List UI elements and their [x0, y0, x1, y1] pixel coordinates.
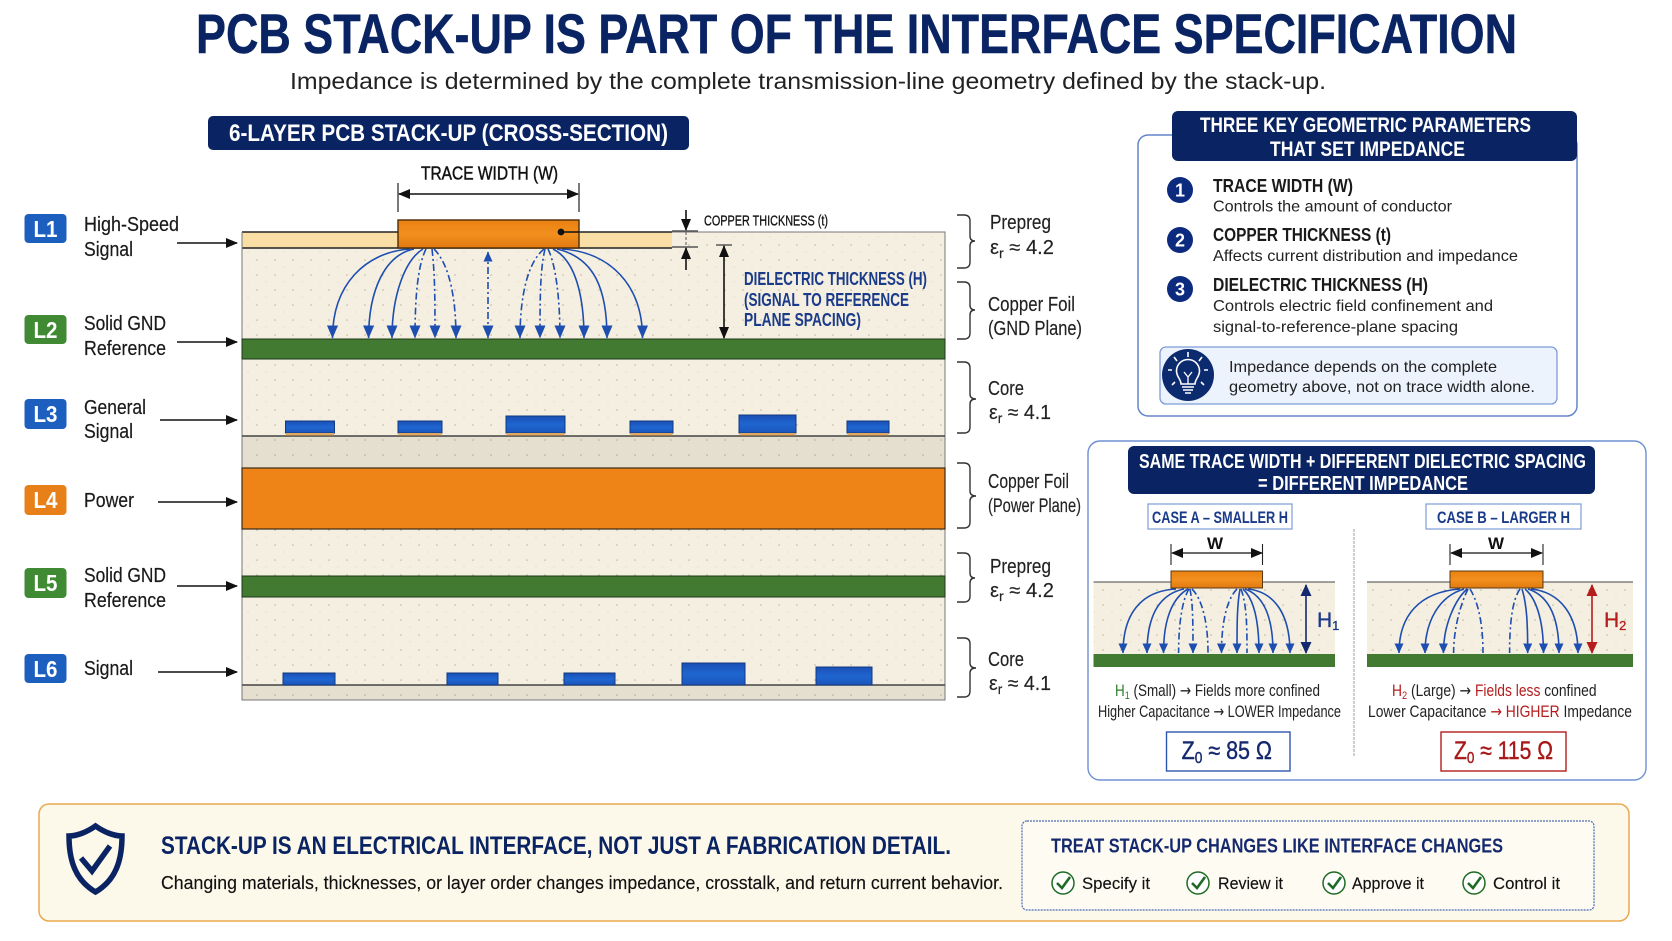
- case B H2 dimension: [1592, 585, 1626, 653]
- check: approve: Approve it: [1352, 874, 1424, 893]
- core upper: ≈ 4.1: [1002, 402, 1051, 424]
- case A width dimension: W: [1207, 534, 1224, 553]
- material annotations: [957, 212, 1082, 697]
- panel: three key geometric parameters: [1138, 111, 1577, 416]
- check: control: [1463, 872, 1560, 894]
- case B explanation: Lower Capacitance → HIGHER Impedance: [1368, 702, 1632, 721]
- case A explanation: Higher Capacitance → LOWER Impedance: [1098, 702, 1341, 721]
- case A impedance value: Z: [1182, 737, 1197, 765]
- prepreg lower: ε: [990, 580, 999, 602]
- core upper: r: [998, 410, 1003, 426]
- case A explanation: → Fields more confined: [1180, 681, 1349, 700]
- case B width dimension: [1450, 534, 1543, 565]
- core lower: Core: [988, 649, 1024, 671]
- parameter 2: Affects current distribution and impedance: [1213, 248, 1518, 265]
- core upper: [957, 362, 1051, 433]
- check: review: [1187, 872, 1283, 894]
- case A label: CASE A – SMALLER H: [1152, 508, 1288, 527]
- case B explanation: [1368, 681, 1632, 721]
- layer L3 label: General: [84, 397, 146, 419]
- prepreg lower: Prepreg: [990, 556, 1051, 578]
- copper foil GND: [957, 282, 1082, 340]
- prepreg top: ≈ 4.2: [1004, 237, 1054, 259]
- parameter 2: 2: [1175, 230, 1185, 250]
- parameter 3: 3: [1175, 280, 1185, 300]
- layer L2 label: L2: [34, 317, 58, 343]
- case B impedance value: 0: [1467, 750, 1474, 767]
- check: control: Control it: [1493, 874, 1560, 893]
- parameter 3: [1167, 275, 1493, 336]
- case B impedance value: ≈ 115 Ω: [1474, 737, 1553, 765]
- main copper trace: [398, 220, 579, 248]
- banner heading: STACK-UP IS AN ELECTRICAL INTERFACE, NOT JUST A FABRICATION DETAIL.: [161, 832, 951, 860]
- callout: impedance note: geometry above, not on trace width alone.: [1229, 379, 1535, 396]
- check: specify: Specify it: [1082, 874, 1150, 893]
- subtitle: Impedance is determined by the complete transmission-line geometry defined by the stack-up.: [290, 68, 1326, 94]
- copper foil power: Copper Foil: [988, 471, 1069, 493]
- dielectric thickness dimension: [716, 245, 927, 338]
- case B explanation: 2: [1402, 690, 1407, 702]
- power plane L4: [242, 468, 945, 529]
- parameter 3: DIELECTRIC THICKNESS (H): [1213, 275, 1428, 295]
- case A H1 dimension: 1: [1332, 618, 1339, 633]
- check: approve: [1323, 872, 1424, 894]
- case B cross-section: [1367, 571, 1633, 667]
- core upper: ε: [989, 402, 998, 424]
- L3 signal traces: [286, 415, 889, 436]
- parameter 3: Controls electric field confinement and: [1213, 298, 1493, 315]
- callout: impedance note: Impedance depends on the complete: [1229, 359, 1497, 376]
- layer L1 label: [24, 214, 237, 261]
- layer L1 label: L1: [34, 216, 58, 242]
- layer L2 label: Reference: [84, 338, 166, 360]
- panel heading: THAT SET IMPEDANCE: [1270, 138, 1465, 161]
- case A cross-section: [1094, 571, 1335, 667]
- core lower: [957, 638, 1051, 697]
- panel heading: [1172, 111, 1577, 161]
- layer L5 label: Reference: [84, 590, 166, 612]
- layer L4 label: [24, 485, 237, 515]
- case B label: [1426, 504, 1581, 529]
- case A label: [1148, 504, 1292, 529]
- case B impedance value: Z: [1454, 737, 1469, 765]
- prepreg lower: ≈ 4.2: [1004, 580, 1054, 602]
- parameter 2: [1167, 225, 1518, 265]
- core lower: ε: [989, 673, 998, 695]
- panel: bottom takeaway banner: [39, 804, 1629, 921]
- case B explanation: (Large): [1407, 682, 1459, 700]
- layer L5 label: [24, 565, 237, 612]
- L6 signal traces: [283, 663, 872, 685]
- layer L3 label: L3: [34, 401, 58, 427]
- dielectric layers: [242, 232, 945, 700]
- layer badges and labels: [24, 214, 237, 683]
- copper foil GND: (GND Plane): [988, 318, 1082, 340]
- panel heading: = DIFFERENT IMPEDANCE: [1258, 473, 1468, 495]
- parameter 1: TRACE WIDTH (W): [1213, 176, 1353, 196]
- case B explanation: → Fields less confined: [1459, 681, 1607, 700]
- case B explanation: H: [1392, 682, 1407, 702]
- parameter 1: Controls the amount of conductor: [1213, 198, 1453, 216]
- checklist box: TREAT STACK-UP CHANGES LIKE INTERFACE CHANGES: [1051, 836, 1503, 858]
- layer L5 label: Solid GND: [84, 565, 166, 587]
- dielectric thickness dimension: PLANE SPACING): [744, 310, 861, 330]
- layer L4 label: L4: [34, 487, 58, 513]
- case B H2 dimension: H: [1604, 609, 1619, 632]
- layer L6 label: Signal: [84, 658, 133, 680]
- case A H1 dimension: [1306, 585, 1339, 653]
- dielectric thickness dimension: DIELECTRIC THICKNESS (H): [744, 269, 927, 289]
- electric field lines: [332, 249, 642, 338]
- prepreg top: [957, 212, 1054, 268]
- stack-up cross-section: [242, 164, 945, 700]
- checklist box: [1022, 821, 1594, 910]
- panel: same trace width comparison: [1088, 441, 1646, 780]
- icon: shield with check: [69, 826, 122, 892]
- core lower: ≈ 4.1: [1002, 673, 1051, 695]
- icon: lightbulb: [1162, 349, 1214, 401]
- case A H1 dimension: H: [1317, 609, 1332, 632]
- layer L6 label: L6: [34, 656, 58, 682]
- case B width dimension: W: [1488, 534, 1505, 553]
- layer L3 label: Signal: [84, 421, 133, 443]
- panel heading: [1128, 446, 1595, 495]
- parameter 2: COPPER THICKNESS (t): [1213, 225, 1391, 245]
- layer L1 label: High-Speed: [84, 214, 179, 236]
- case A explanation: 1: [1125, 690, 1130, 702]
- check: review: Review it: [1218, 874, 1283, 893]
- heading: 6-layer stack-up: 6-LAYER PCB STACK-UP (CROSS-SECTION): [229, 120, 668, 147]
- case A explanation: H: [1115, 682, 1130, 702]
- case B label: CASE B – LARGER H: [1437, 508, 1570, 527]
- copper foil power: (Power Plane): [988, 496, 1081, 517]
- case B impedance value: [1441, 732, 1566, 771]
- ground plane L5: [242, 576, 945, 597]
- copper foil power: [957, 463, 1081, 528]
- banner description: Changing materials, thicknesses, or layer order changes impedance, crosstalk, and return current behavior.: [161, 873, 1003, 893]
- check: specify: [1052, 872, 1150, 894]
- case A impedance value: [1166, 732, 1290, 771]
- prepreg top: Prepreg: [990, 212, 1051, 234]
- prepreg lower: r: [999, 588, 1004, 604]
- case B: [1367, 504, 1633, 771]
- callout: impedance note: [1160, 347, 1557, 404]
- prepreg top: r: [999, 245, 1004, 261]
- parameter 1: 1: [1175, 180, 1185, 200]
- case A impedance value: 0: [1195, 750, 1202, 767]
- dielectric thickness dimension: (SIGNAL TO REFERENCE: [744, 290, 909, 310]
- prepreg top: ε: [990, 237, 999, 259]
- case A impedance value: ≈ 85 Ω: [1202, 737, 1272, 765]
- layer L1 label: Signal: [84, 239, 133, 261]
- layer L6 label: [24, 654, 237, 683]
- case A width dimension: [1171, 534, 1262, 565]
- layer L2 label: [24, 313, 237, 360]
- layer L4 label: Power: [84, 490, 134, 512]
- panel heading: THREE KEY GEOMETRIC PARAMETERS: [1200, 114, 1531, 137]
- copper thickness dimension: COPPER THICKNESS (t): [704, 212, 828, 230]
- parameter 1: [1167, 176, 1453, 216]
- case A: [1094, 504, 1341, 771]
- trace width dimension: TRACE WIDTH (W): [421, 164, 558, 184]
- trace width dimension: [398, 164, 579, 212]
- core upper: Core: [988, 378, 1024, 400]
- layer L2 label: Solid GND: [84, 313, 166, 335]
- copper foil GND: Copper Foil: [988, 294, 1075, 316]
- layer L3 label: [24, 397, 237, 443]
- parameter 3: signal-to-reference-plane spacing: [1213, 319, 1458, 336]
- case A explanation: (Small): [1130, 682, 1180, 700]
- case divider: [1353, 529, 1355, 756]
- case B H2 dimension: 2: [1619, 618, 1626, 633]
- case A explanation: [1098, 681, 1341, 721]
- layer L5 label: L5: [34, 570, 58, 596]
- core lower: r: [998, 681, 1003, 697]
- prepreg lower: [957, 553, 1054, 604]
- ground plane L2: [242, 339, 945, 359]
- copper thickness dimension: [672, 210, 828, 270]
